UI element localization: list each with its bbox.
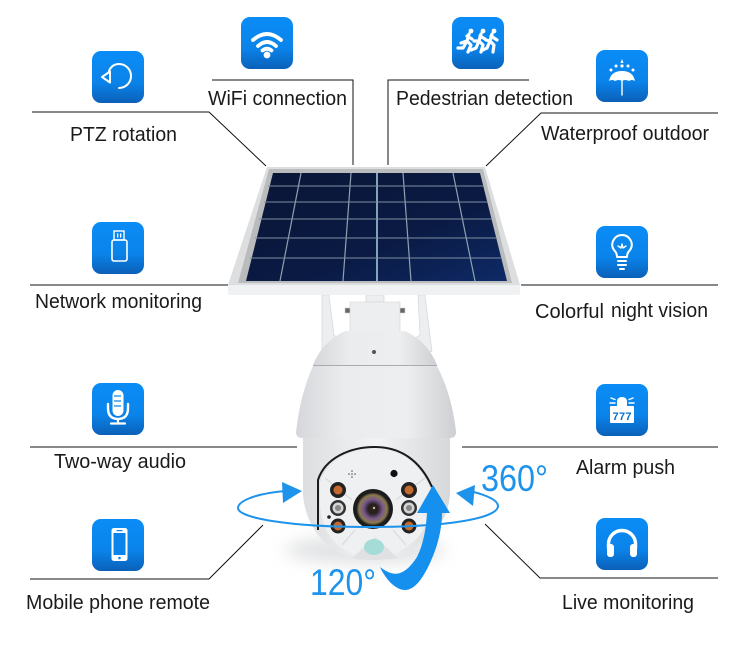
left arrowhead	[282, 482, 302, 503]
icon: alarm 777	[596, 384, 648, 436]
sensor and mic dots	[327, 470, 398, 519]
leader line: WiFi connection	[212, 80, 353, 165]
front face	[320, 450, 431, 560]
leader line: Pedestrian detection	[388, 80, 529, 165]
camera body	[296, 331, 456, 560]
solar cells	[246, 173, 507, 281]
icon: USB stick	[92, 222, 144, 274]
tilt arrow 120	[380, 485, 450, 590]
label: Colorful night vision: night vision	[611, 300, 708, 322]
label: Mobile phone remote: Mobile phone remote	[26, 592, 210, 614]
lower housing	[303, 438, 450, 560]
label: Pedestrian detection: Pedestrian detection	[396, 88, 573, 110]
dome	[296, 366, 456, 438]
icon: running pedestrians	[452, 17, 504, 69]
leader line: Mobile phone remote	[30, 525, 263, 579]
rotation ring 360	[238, 482, 498, 527]
icon: mobile phone	[92, 519, 144, 571]
leader line: Waterproof outdoor	[486, 113, 718, 166]
camera ground shadow	[285, 536, 445, 564]
label: WiFi connection: WiFi connection	[208, 88, 347, 110]
label: Waterproof outdoor: Waterproof outdoor	[541, 123, 709, 145]
right arrowhead	[456, 485, 475, 506]
icon: microphone	[92, 383, 144, 435]
label: Live monitoring: Live monitoring	[562, 592, 694, 614]
label: Two-way audio: Two-way audio	[54, 451, 186, 473]
label: Network monitoring: Network monitoring	[35, 291, 202, 313]
label: 360 degrees: 360°	[481, 458, 548, 499]
front face trim	[318, 447, 432, 530]
label: 120 degrees: 120°	[310, 562, 376, 603]
solar panel	[228, 167, 520, 295]
cell grid	[250, 173, 502, 281]
label: PTZ rotation: PTZ rotation	[70, 124, 177, 146]
panel frame	[228, 167, 520, 295]
leader line: Two-way audio	[30, 446, 297, 448]
leader line: PTZ rotation	[32, 112, 266, 166]
icon: light bulb	[596, 226, 648, 278]
lens	[353, 489, 393, 529]
PIR sensor	[364, 539, 384, 555]
icon: alarm 777: 777	[612, 411, 632, 423]
upper cap	[313, 331, 437, 365]
label: Alarm push: Alarm push	[576, 457, 675, 479]
leader line: Colorful night vision	[521, 284, 718, 286]
LEDs	[330, 482, 417, 534]
icon: PTZ rotation	[92, 51, 144, 103]
leader line: Alarm push	[462, 446, 718, 448]
icon: headphones	[596, 518, 648, 570]
label: Colorful night vision: Colorful	[535, 301, 604, 323]
icon: umbrella	[596, 50, 648, 102]
leader line: Live monitoring	[485, 524, 718, 578]
leader line: Network monitoring	[30, 284, 229, 286]
label: Colorful night vision	[535, 300, 708, 323]
icon: WiFi	[241, 17, 293, 69]
mount arms	[322, 295, 432, 352]
